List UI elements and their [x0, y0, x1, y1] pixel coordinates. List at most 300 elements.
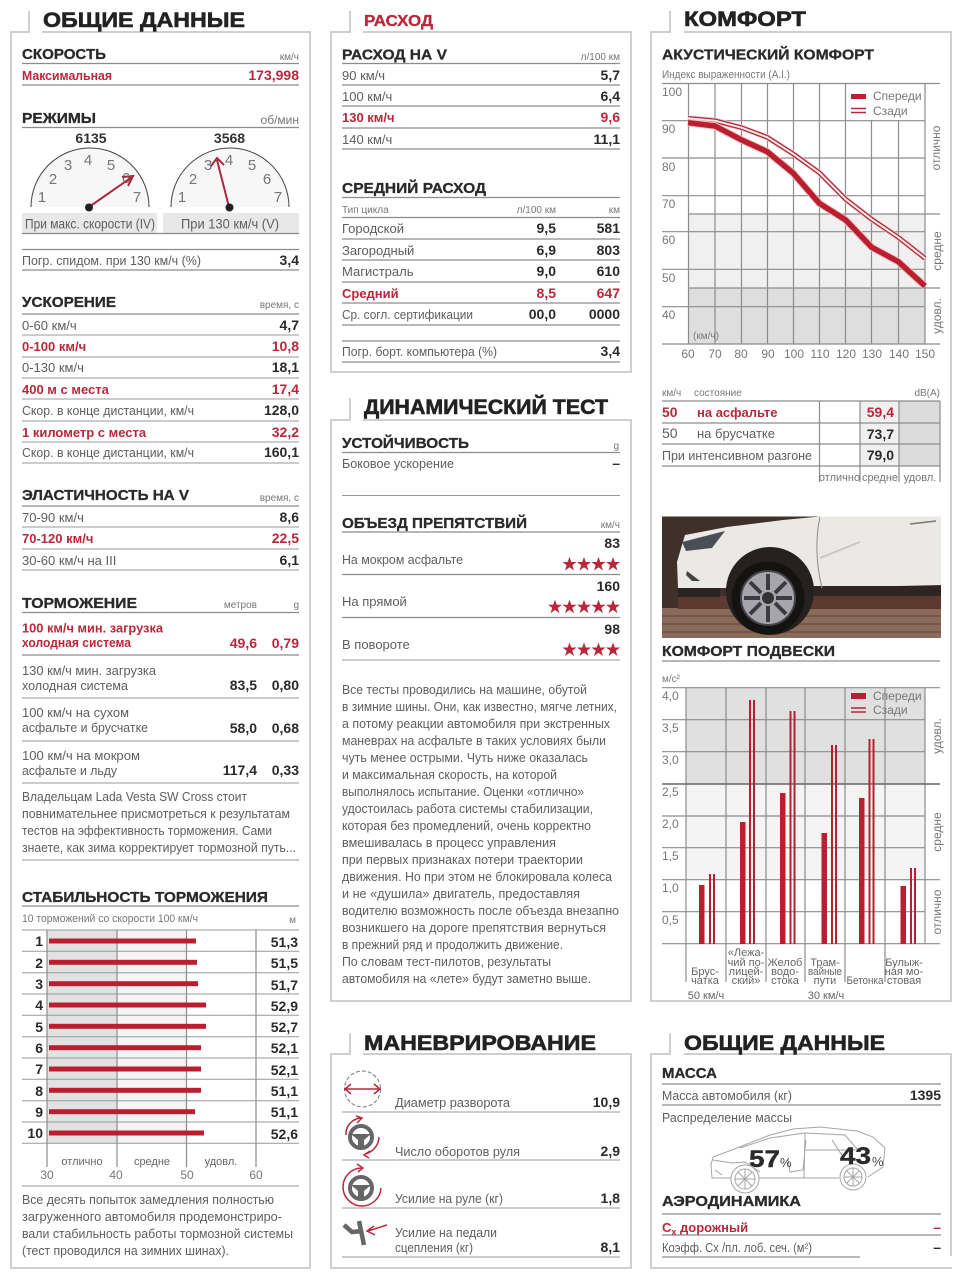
chart: suspension comfort: средне — [930, 812, 944, 852]
chart: ten braking runs: 51,1 — [271, 1104, 298, 1120]
table: average consumption: 8,5 — [537, 285, 556, 301]
table: consumption at speed: 140 км/ч — [342, 132, 392, 147]
block: braking: 117,4 — [223, 762, 257, 778]
chart: ten braking runs: 50 — [180, 1168, 194, 1182]
title: consumption: РАСХОД — [364, 13, 433, 30]
block: elasticity: 6,1 — [280, 552, 299, 568]
chart: acoustic comfort: средне — [930, 231, 944, 271]
gauge: at 130 km/h: 4 — [225, 152, 233, 169]
table: noise level: км/ч — [662, 388, 681, 399]
axis labels: surfaces: чатка — [691, 975, 720, 987]
block: speed: км/ч — [280, 52, 299, 63]
block: acceleration — [22, 295, 299, 463]
table: average consumption: 647 — [597, 285, 620, 301]
chart: ten braking runs: 52,1 — [271, 1062, 298, 1078]
block: braking: 58,0 — [230, 720, 257, 736]
block: braking: метров — [224, 600, 257, 611]
text: test description — [342, 682, 619, 986]
illustration: car outline — [711, 1127, 885, 1193]
table: consumption at speed: 90 км/ч — [342, 68, 385, 83]
block: mass: % — [780, 1155, 792, 1170]
table: noise level: 73,7 — [867, 426, 894, 442]
legend — [851, 89, 922, 118]
table: average consumption: 610 — [597, 263, 620, 279]
table: average consumption: 9,5 — [537, 220, 556, 236]
gauge: at 130 km/h: 3 — [204, 157, 212, 174]
legend — [851, 689, 922, 717]
chart: ten braking runs: 7 — [35, 1061, 43, 1077]
block: obstacle avoidance: 160 — [597, 578, 620, 594]
table: noise level — [662, 388, 940, 484]
axis labels: surfaces: 50 км/ч — [688, 990, 724, 1002]
block: elasticity: 70-120 км/ч — [22, 531, 93, 546]
panel: maneuvering: 2,9 — [601, 1143, 620, 1159]
text: test description: маневрах на асфальте в таких условиях были — [342, 733, 606, 748]
chart: acoustic comfort: удовл. — [930, 298, 944, 334]
panel: maneuvering: Усилие на педали — [395, 1225, 497, 1240]
chart: suspension comfort: 0,5 — [662, 913, 679, 927]
axis labels: surfaces: лицей- — [729, 966, 764, 978]
gauge: at top speed: 2 — [49, 171, 57, 188]
text: braking note: повнимательнее присмотреться к результатам — [22, 806, 290, 821]
chart: acoustic comfort: 70 — [662, 197, 676, 211]
block: mass: % — [872, 1154, 884, 1169]
axis labels: surfaces: стока — [771, 975, 800, 987]
block: obstacle avoidance: На прямой — [342, 594, 407, 609]
curve: rear — [688, 118, 925, 258]
gauge: at 130 km/h: 1 — [178, 189, 186, 206]
block: acceleration: 160,1 — [264, 444, 299, 460]
table: noise level: на брусчатке — [697, 426, 775, 441]
table: noise level: 50 — [662, 425, 678, 441]
block: stability: g — [613, 441, 619, 452]
block: braking stability: 10 торможений со скорости 100 км/ч — [22, 913, 198, 925]
panel: maneuvering: сцепления (кг) — [395, 1240, 473, 1255]
axis labels: surfaces: вайные — [808, 966, 842, 978]
chart: ten braking runs: 8 — [35, 1083, 43, 1099]
block: acceleration: Скор. в конце дистанции, км/ч — [22, 403, 194, 418]
chart: ten braking runs: 60 — [249, 1168, 263, 1182]
table: noise level: удовл. — [904, 472, 936, 484]
legend: Спереди — [873, 689, 922, 703]
chart: acoustic comfort: 130 — [862, 347, 882, 361]
chart: acoustic comfort: 140 — [889, 347, 909, 361]
gauge: at 130 km/h — [171, 148, 289, 212]
title: dynamic test: ДИНАМИЧЕСКИЙ ТЕСТ — [364, 394, 608, 419]
block: obstacle avoidance: 83 — [604, 535, 620, 551]
bars: rear — [709, 700, 916, 944]
block: elasticity: ЭЛАСТИЧНОСТЬ НА V — [22, 488, 189, 504]
block: braking: 0,80 — [272, 677, 299, 693]
chart: acoustic comfort: 60 — [681, 347, 695, 361]
text: test description: водителю возможность после объезда внезапно — [342, 903, 619, 918]
text: test description: удостоилась работа системы стабилизации, — [342, 801, 593, 816]
panel: maneuvering: Число оборотов руля — [395, 1144, 520, 1159]
block: braking stability — [22, 890, 299, 1258]
chart: acoustic comfort: 90 — [662, 122, 676, 136]
rating: five stars — [548, 600, 620, 613]
chart: acoustic comfort — [662, 83, 944, 361]
block: aerodynamics: АЭРОДИНАМИКА — [662, 1194, 802, 1210]
block: stability: – — [612, 455, 620, 471]
chart: ten braking runs: 30 — [40, 1168, 54, 1182]
block: aerodynamics — [662, 1194, 953, 1267]
panel: comfort: Индекс выраженности (A.I.) — [662, 69, 790, 81]
text: test description: в зимние шины. Они, как известно, мягче летних, — [342, 699, 617, 714]
block: aerodynamics: x — [671, 1227, 676, 1237]
chart: ten braking runs: 5 — [35, 1019, 43, 1035]
block: mass: Распределение массы — [662, 1110, 792, 1125]
table: consumption at speed: 130 км/ч — [342, 110, 395, 125]
table: average consumption: Городской — [342, 221, 404, 236]
block: braking stability: м — [289, 915, 296, 926]
heading: acoustic comfort: АКУСТИЧЕСКИЙ КОМФОРТ — [662, 46, 874, 64]
block: engine modes: 6135 — [75, 130, 107, 146]
chart: suspension comfort: 2,0 — [662, 817, 679, 831]
chart: ten braking runs: 51,5 — [271, 955, 298, 971]
axis labels: surfaces: ский» — [732, 975, 760, 987]
block: braking: g — [293, 600, 299, 611]
panel: consumption — [331, 11, 631, 372]
gauge: at 130 km/h: 5 — [248, 157, 256, 174]
legend: Сзади — [873, 703, 908, 717]
text: test description: и не «душила» двигатель, предоставляя — [342, 886, 580, 901]
panel: maneuvering: 1,8 — [601, 1190, 620, 1206]
axis labels: surfaces: Бетонка — [846, 975, 884, 987]
legend: Спереди — [873, 89, 922, 103]
title: general data: ОБЩИЕ ДАННЫЕ — [684, 1031, 885, 1055]
axis labels: surfaces: Желоб — [768, 957, 802, 969]
block: acceleration: 0-130 км/ч — [22, 360, 84, 375]
chart: acoustic comfort: 60 — [662, 233, 676, 247]
block: braking: асфальте и брусчатке — [22, 720, 148, 735]
chart: acoustic comfort: 50 — [662, 271, 676, 285]
chart: acoustic comfort: 90 — [761, 347, 775, 361]
table: noise level: отлично — [819, 472, 860, 484]
panel: maneuvering: Диаметр разворота — [395, 1095, 511, 1110]
block: acceleration: УСКОРЕНИЕ — [22, 295, 116, 311]
chart: ten braking runs: удовл. — [205, 1156, 237, 1168]
block: braking: 100 км/ч на сухом — [22, 705, 129, 720]
text: stability note: загруженного автомобиля продемонстриро- — [22, 1209, 282, 1224]
text: braking note: Владельцам Lada Vesta SW Cross стоит — [22, 789, 247, 804]
block: speed — [22, 47, 299, 85]
text: test description: в прежний ряд и продолжить движение. — [342, 937, 563, 952]
block: obstacle avoidance: 98 — [604, 621, 620, 637]
block: engine modes: При макс. скорости (IV) — [25, 216, 155, 232]
text: test description: движения. Но при этом не блокировала колеса — [342, 869, 613, 884]
chart: suspension comfort: отлично — [930, 889, 944, 934]
heading: suspension comfort: КОМФОРТ ПОДВЕСКИ — [662, 644, 835, 660]
text: test description: при первых признаках потери траектории — [342, 852, 583, 867]
block: stability — [342, 434, 620, 496]
table: average consumption: 581 — [597, 220, 620, 236]
axis labels: surfaces: ная мо- — [885, 966, 924, 978]
block: aerodynamics: Коэфф. Сх /пл. лоб. сеч. (м²) — [662, 1240, 812, 1255]
title: general data: ОБЩИЕ ДАННЫЕ — [43, 8, 245, 32]
gauge: at top speed: 5 — [107, 157, 115, 174]
table: noise level: состояние — [694, 388, 742, 399]
text: stability note — [22, 1192, 293, 1258]
block: braking: 49,6 — [230, 635, 257, 651]
chart: suspension comfort: 3,5 — [662, 721, 679, 735]
text: stability note: вали стабильность работы тормозной системы — [22, 1226, 293, 1241]
block: acceleration: 400 м с места — [22, 382, 110, 397]
icon: steering wheel effort — [343, 1164, 381, 1206]
block: stability: Боковое ускорение — [342, 456, 454, 471]
block: acceleration: 0-60 км/ч — [22, 318, 77, 333]
block: engine modes: Погр. спидом. при 130 км/ч (%) — [22, 253, 201, 268]
table: average consumption: СРЕДНИЙ РАСХОД — [342, 179, 487, 197]
chart: ten braking runs: отлично — [61, 1156, 103, 1168]
chart: ten braking runs — [22, 930, 299, 1182]
text: test description: выполнялось испытание. Оценки «отлично» — [342, 784, 584, 799]
block: aerodynamics: дорожный — [676, 1220, 748, 1235]
chart: ten braking runs: 3 — [35, 976, 43, 992]
table: average consumption: 0000 — [589, 306, 620, 322]
gauge: at 130 km/h: 6 — [263, 171, 271, 188]
chart: ten braking runs: 52,6 — [271, 1126, 298, 1142]
chart: acoustic comfort: отлично — [929, 125, 943, 170]
table: average consumption — [342, 179, 620, 362]
text: test description: которая без промедлений, очень корректно — [342, 818, 591, 833]
block: aerodynamics: С — [662, 1220, 671, 1235]
text: test description: а потому реакции автомобиля при экстренных — [342, 716, 610, 731]
chart: suspension comfort — [662, 688, 944, 1002]
table: consumption at speed — [342, 48, 620, 149]
panel: maneuvering: 10,9 — [593, 1094, 620, 1110]
chart: ten braking runs: 10 — [27, 1125, 43, 1141]
icon: steering wheel turns — [346, 1116, 379, 1158]
block: speed: 173,998 — [248, 67, 299, 83]
gauge: at 130 km/h: 2 — [189, 171, 197, 188]
title: maneuvering: МАНЕВРИРОВАНИЕ — [364, 1031, 596, 1055]
table: average consumption: Тип цикла — [342, 205, 389, 216]
chart: acoustic comfort: (км/ч) — [693, 331, 719, 342]
table: noise level: 79,0 — [867, 447, 894, 463]
block: acceleration: 4,7 — [280, 317, 299, 333]
chart: acoustic comfort: 150 — [915, 347, 935, 361]
block: obstacle avoidance: км/ч — [601, 520, 620, 531]
block: mass: 1395 — [910, 1087, 941, 1103]
axis labels: surfaces — [688, 946, 924, 1002]
gauge: at top speed: 3 — [64, 157, 72, 174]
table: average consumption: Погр. борт. компьютера (%) — [342, 344, 497, 359]
chart: ten braking runs: 51,7 — [271, 977, 298, 993]
table: average consumption: Ср. согл. сертификации — [342, 307, 473, 322]
rating: four stars — [562, 557, 620, 570]
block: acceleration: 32,2 — [272, 424, 299, 440]
axis labels: surfaces: Брус- — [691, 966, 719, 978]
block: acceleration: Скор. в конце дистанции, км/ч — [22, 445, 194, 460]
table: consumption at speed: 9,6 — [601, 109, 620, 125]
block: speed: СКОРОСТЬ — [22, 47, 106, 63]
title: comfort: КОМФОРТ — [684, 7, 806, 31]
axis labels: surfaces: чий по- — [728, 957, 765, 969]
table: consumption at speed: РАСХОД НА V — [342, 48, 447, 64]
block: braking: 0,33 — [272, 762, 299, 778]
panel: maneuvering — [331, 1031, 631, 1268]
table: average consumption: 00,0 — [529, 306, 556, 322]
table: consumption at speed: 100 км/ч — [342, 89, 392, 104]
block: obstacle avoidance — [342, 514, 620, 660]
chart: ten braking runs: 51,3 — [271, 934, 298, 950]
axis labels: surfaces: водо- — [771, 966, 799, 978]
block: engine modes: 3568 — [214, 130, 245, 146]
gauge: at top speed: 7 — [133, 189, 141, 206]
chart: ten braking runs: 2 — [35, 955, 43, 971]
table: average consumption: 9,0 — [537, 263, 556, 279]
block: acceleration: 18,1 — [272, 359, 299, 375]
icon: turning circle — [344, 1071, 380, 1107]
table: average consumption: 3,4 — [601, 343, 620, 359]
block: braking: 83,5 — [230, 677, 257, 693]
block: braking: 100 км/ч на мокром — [22, 748, 140, 763]
chart: suspension comfort: 3,0 — [662, 753, 679, 767]
block: stability: УСТОЙЧИВОСТЬ — [342, 434, 469, 452]
block: braking: 0,79 — [272, 635, 299, 651]
table: average consumption: км — [609, 205, 620, 216]
gauge: at top speed — [31, 148, 149, 212]
chart: suspension comfort: 1,5 — [662, 849, 679, 863]
chart: acoustic comfort: 120 — [836, 347, 856, 361]
photo: car front wheel — [662, 516, 941, 638]
table: noise level: 50 — [662, 404, 678, 420]
block: mass: 57 — [749, 1146, 780, 1173]
chart: ten braking runs: 1 — [35, 933, 43, 949]
chart: acoustic comfort: 80 — [662, 160, 676, 174]
block: elasticity: 22,5 — [272, 530, 299, 546]
text: braking note — [22, 789, 296, 855]
chart: ten braking runs: средне — [134, 1156, 170, 1168]
chart: suspension comfort: 1,0 — [662, 881, 679, 895]
block: obstacle avoidance: ОБЪЕЗД ПРЕПЯТСТВИЙ — [342, 514, 527, 532]
gauge: at top speed: 6 — [122, 170, 130, 187]
table: noise level: на асфальте — [697, 405, 777, 420]
block: braking: 130 км/ч мин. загрузка — [22, 663, 157, 678]
panel: comfort — [651, 7, 951, 1002]
chart: ten braking runs: 40 — [109, 1168, 123, 1182]
text: test description: чуть менее острыми. Чуть ниже оказалась — [342, 750, 588, 765]
chart: acoustic comfort: 80 — [734, 347, 748, 361]
block: acceleration: 17,4 — [272, 381, 299, 397]
panel: maneuvering: Усилие на руле (кг) — [395, 1191, 503, 1206]
table: average consumption: Загородный — [342, 243, 414, 258]
axis labels: surfaces: 30 км/ч — [808, 990, 844, 1002]
legend: Сзади — [873, 104, 908, 118]
table: consumption at speed: 11,1 — [594, 131, 620, 147]
table: average consumption: Средний — [342, 286, 399, 301]
text: braking note: знаете, как зима корректирует тормозной путь... — [22, 840, 296, 855]
axis labels: surfaces: Трам- — [810, 957, 840, 969]
table: consumption at speed: 5,7 — [601, 67, 620, 83]
chart: suspension comfort: удовл. — [930, 718, 944, 754]
text: test description: вмешивалась в процесс управления — [342, 835, 556, 850]
chart: ten braking runs: 52,1 — [271, 1040, 298, 1056]
chart: acoustic comfort: 70 — [708, 347, 722, 361]
text: braking note: тестов на эффективность торможения. Сами — [22, 823, 272, 838]
chart: ten braking runs: 9 — [35, 1104, 43, 1120]
block: aerodynamics: – — [933, 1239, 941, 1255]
panel: dynamic test — [331, 394, 631, 1001]
axis labels: surfaces: «Лежа- — [728, 947, 765, 959]
table: average consumption: 6,9 — [537, 242, 556, 258]
block: elasticity: 30-60 км/ч на III — [22, 553, 116, 568]
axis labels: surfaces: стовая — [887, 975, 921, 987]
block: engine modes: 3,4 — [280, 252, 299, 268]
block: braking: 100 км/ч мин. загрузка — [22, 620, 164, 636]
block: braking: 0,68 — [272, 720, 299, 736]
table: average consumption: л/100 км — [517, 205, 556, 216]
block: elasticity: 70-90 км/ч — [22, 510, 84, 525]
text: test description: Все тесты проводились на машине, обутой — [342, 682, 587, 697]
block: engine modes: об/мин — [261, 113, 299, 127]
block: braking — [22, 596, 299, 860]
gauge: at 130 km/h: 7 — [274, 189, 282, 206]
gauge: at top speed: 4 — [84, 152, 92, 169]
bars: front — [699, 793, 906, 944]
block: aerodynamics: – — [933, 1219, 941, 1235]
chart: suspension comfort: 2,5 — [662, 785, 679, 799]
block: speed: Максимальная — [22, 68, 112, 83]
chart: ten braking runs: 51,1 — [271, 1083, 298, 1099]
block: braking stability: СТАБИЛЬНОСТЬ ТОРМОЖЕНИЯ — [22, 890, 268, 906]
block: elasticity — [22, 488, 299, 570]
table: average consumption: Магистраль — [342, 264, 414, 279]
curve: front — [688, 123, 925, 286]
text: test description: и максимальная скорость, на которой — [342, 767, 557, 782]
chart: ten braking runs: 52,9 — [271, 998, 298, 1014]
text: test description: По словам тест-пилотов, результаты — [342, 954, 551, 969]
block: obstacle avoidance: В повороте — [342, 637, 410, 652]
block: braking: асфальте и льду — [22, 763, 117, 778]
table: consumption at speed: 6,4 — [601, 88, 620, 104]
chart: acoustic comfort: 100 — [784, 347, 804, 361]
block: braking: холодная система — [22, 635, 132, 650]
table: consumption at speed: л/100 км — [581, 52, 620, 63]
chart: acoustic comfort: 110 — [810, 347, 830, 361]
axis labels: surfaces: пути — [814, 975, 836, 987]
block: acceleration: время, с — [260, 300, 299, 311]
chart: acoustic comfort: 100 — [662, 85, 682, 99]
panel: comfort: м/с² — [662, 674, 681, 685]
table: noise level: dB(A) — [914, 388, 940, 399]
block: acceleration: 0-100 км/ч — [22, 339, 86, 354]
block: engine modes: При 130 км/ч (V) — [181, 216, 279, 232]
axis labels: surfaces: Булыж- — [885, 957, 923, 969]
chart: ten braking runs: 6 — [35, 1040, 43, 1056]
chart: suspension comfort: 4,0 — [662, 689, 679, 703]
block: engine modes — [22, 111, 299, 270]
chart: ten braking runs: 4 — [35, 997, 43, 1013]
rating: four stars — [562, 642, 620, 656]
text: stability note: Все десять попыток замедления полностью — [22, 1192, 274, 1207]
block: braking: ТОРМОЖЕНИЕ — [22, 596, 137, 612]
block: engine modes: РЕЖИМЫ — [22, 111, 96, 127]
block: mass: Масса автомобиля (кг) — [662, 1088, 792, 1103]
panel: general data — [11, 8, 310, 1268]
panel: general data, mass and aerodynamics — [651, 1031, 953, 1268]
gauge: at top speed: 1 — [38, 189, 46, 206]
block: obstacle avoidance: На мокром асфальте — [342, 552, 463, 567]
table: noise level: средне — [862, 472, 898, 484]
block: mass: МАССА — [662, 1066, 718, 1082]
text: stability note: (тест проводился на зимних шинах). — [22, 1243, 229, 1258]
table: noise level: При интенсивном разгоне — [662, 448, 812, 463]
block: mass — [662, 1066, 941, 1193]
chart: ten braking runs: 52,7 — [271, 1019, 298, 1035]
block: elasticity: время, с — [260, 493, 299, 504]
